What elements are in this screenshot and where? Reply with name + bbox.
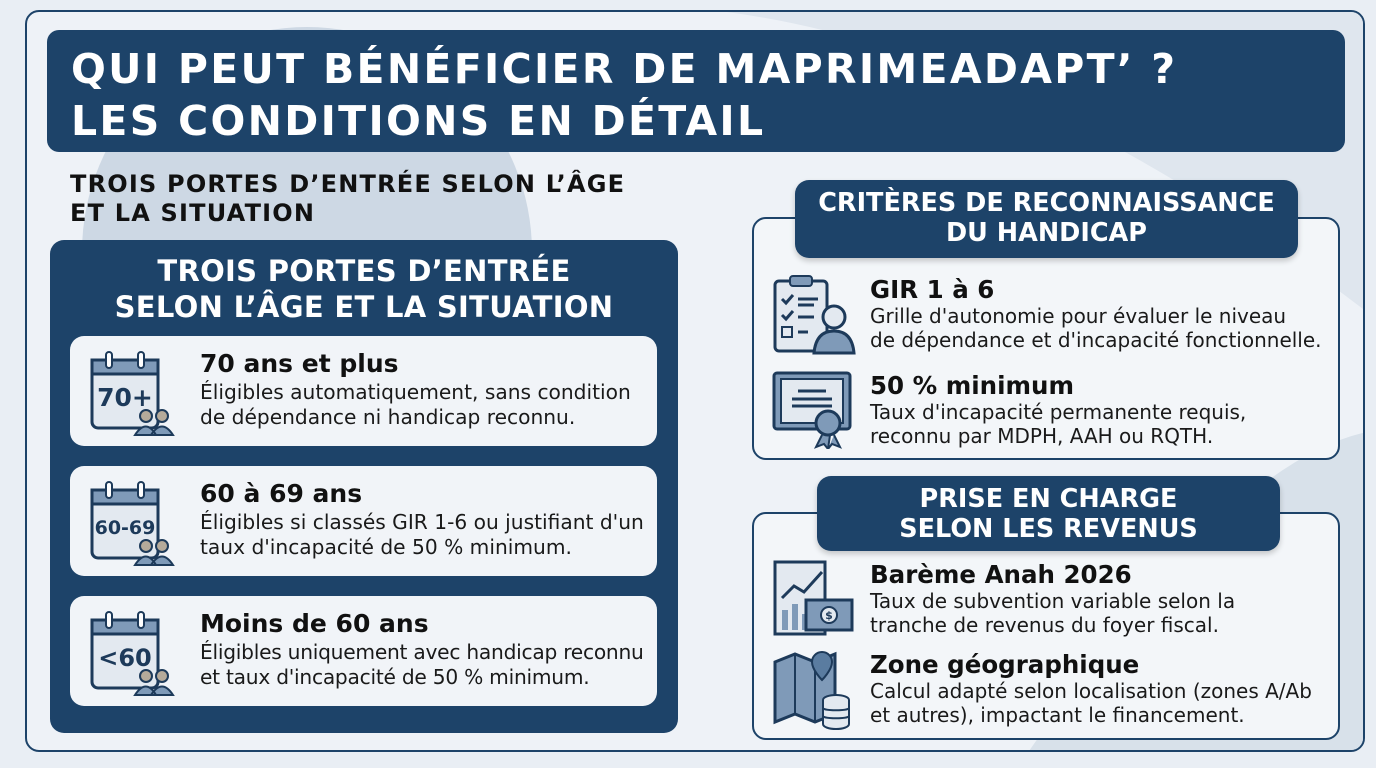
pill: income header: PRISE EN CHARGE (920, 484, 1177, 514)
pill: handicap header: CRITÈRES DE RECONNAISSANCE (818, 188, 1275, 218)
item: zone (870, 650, 1312, 727)
icon: clipboard (774, 275, 856, 354)
card: 70+ (70, 336, 657, 446)
panel heading: TROIS PORTES D’ENTRÉE (157, 254, 571, 288)
item: 50%: 50 % minimum (870, 371, 1074, 400)
item: GIR: GIR 1 à 6 (870, 275, 994, 304)
item: GIR (870, 275, 1322, 352)
icon: map coins (774, 651, 850, 730)
panel heading: SELON L’ÂGE ET LA SITUATION (115, 290, 613, 324)
pill: handicap header (795, 180, 1298, 258)
icon: chart money (774, 560, 854, 636)
subtitle (70, 170, 625, 227)
item: zone: Calcul adapté selon localisation (zones A/Ab (870, 679, 1312, 703)
item: zone: et autres), impactant le financement. (870, 703, 1245, 727)
icon: calendar 70+: 70+ (97, 383, 153, 412)
item: zone: Zone géographique (870, 650, 1139, 679)
card: 60-69: taux d'incapacité de 50 % minimum. (200, 535, 572, 559)
item: Anah: tranche de revenus du foyer fiscal. (870, 613, 1219, 637)
panel heading (115, 254, 613, 324)
item: Anah: Taux de subvention variable selon la (870, 589, 1235, 613)
card: under 60: Moins de 60 ans (200, 609, 429, 638)
card: 70+: de dépendance ni handicap reconnu. (200, 405, 575, 429)
icon: calendar 70+ (90, 351, 175, 436)
title (47, 30, 1345, 152)
item: Anah (870, 560, 1235, 637)
card: under 60: Éligibles uniquement avec handicap reconnu (200, 640, 644, 664)
icon: chart money: $ (825, 609, 833, 622)
card: 70+: Éligibles automatiquement, sans condition (200, 380, 631, 404)
card: under 60: et taux d'incapacité de 50 % minimum. (200, 665, 589, 689)
item: 50%: reconnu par MDPH, AAH ou RQTH. (870, 424, 1213, 448)
panel: income (752, 512, 1340, 740)
pill: income header (817, 476, 1280, 551)
panel: handicap criteria (752, 217, 1340, 460)
card: 60-69: 60 à 69 ans (200, 479, 362, 508)
item: GIR: de dépendance et d'incapacité fonctionnelle. (870, 328, 1322, 352)
card: under 60 (70, 596, 657, 706)
subtitle: ET LA SITUATION (70, 199, 315, 227)
panel: age gates (50, 240, 678, 733)
icon: certificate (772, 372, 852, 449)
icon: calendar 60-69 (90, 481, 175, 566)
title: LES CONDITIONS EN DÉTAIL (71, 97, 765, 145)
item: GIR: Grille d'autonomie pour évaluer le niveau (870, 304, 1286, 328)
card: 70+: 70 ans et plus (200, 349, 398, 378)
subtitle: TROIS PORTES D’ENTRÉE SELON L’ÂGE (70, 170, 625, 198)
card: 60-69: Éligibles si classés GIR 1-6 ou justifiant d'un (200, 510, 644, 534)
title: QUI PEUT BÉNÉFICIER DE MAPRIMEADAPT’ ? (71, 45, 1177, 93)
icon: calendar <60 (90, 611, 175, 696)
item: 50% (870, 371, 1246, 448)
item: Anah: Barème Anah 2026 (870, 560, 1132, 589)
item: 50%: Taux d'incapacité permanente requis, (870, 400, 1246, 424)
icon: calendar <60: <60 (98, 644, 152, 672)
pill: handicap header: DU HANDICAP (946, 218, 1147, 248)
pill: income header: SELON LES REVENUS (899, 514, 1198, 544)
card: 60-69 (70, 466, 657, 576)
icon: calendar 60-69: 60-69 (95, 517, 155, 539)
